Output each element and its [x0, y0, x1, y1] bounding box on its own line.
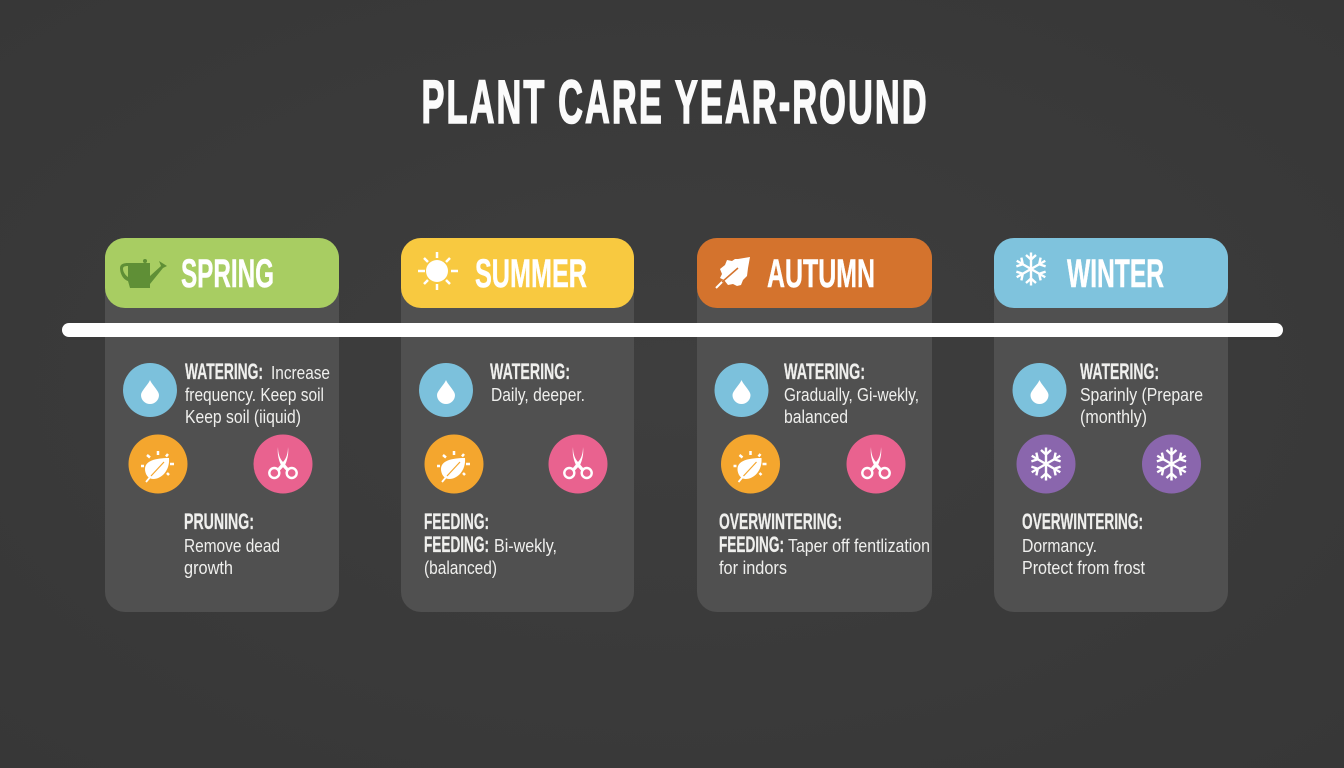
summer header — [401, 238, 634, 308]
autumn header — [697, 238, 932, 308]
spring header — [105, 238, 339, 308]
watering text: WATERING: — [490, 359, 570, 384]
icon: feeding leaf and sun — [128, 434, 188, 494]
icon: watering can — [120, 259, 167, 288]
overwintering text — [1022, 509, 1145, 578]
timeline bar — [62, 323, 1283, 337]
icon: leaf — [716, 257, 750, 288]
watering text: (monthly) — [1080, 406, 1147, 427]
pruning text: growth — [184, 557, 233, 578]
overwintering and feeding text: FEEDING: — [719, 532, 784, 557]
icon: water drop — [714, 363, 768, 417]
watering text: Keep soil (iiquid) — [185, 406, 301, 427]
overwintering and feeding text — [719, 509, 930, 578]
panel: autumn — [697, 238, 932, 612]
icon: scissors — [846, 434, 906, 494]
watering text — [185, 359, 330, 427]
pruning text: PRUNING: — [184, 509, 254, 534]
watering text: WATERING: — [185, 359, 263, 384]
autumn panel body — [697, 238, 932, 612]
overwintering text: Protect from frost — [1022, 557, 1145, 578]
panel: winter — [994, 238, 1228, 612]
watering text: Sparinly (Prepare — [1080, 384, 1203, 405]
feeding text: (balanced) — [424, 557, 497, 578]
watering text: WATERING: — [784, 359, 865, 384]
winter heading: WINTER — [1067, 252, 1164, 296]
icon: feeding leaf and sun — [424, 434, 484, 494]
icon: dormancy snowflake — [1142, 434, 1201, 494]
watering text — [1080, 359, 1203, 427]
winter header — [994, 238, 1228, 308]
overwintering text: Dormancy. — [1022, 535, 1097, 556]
autumn heading: AUTUMN — [767, 252, 875, 296]
overwintering and feeding text: Taper off fentlization — [788, 535, 930, 556]
spring heading: SPRING — [181, 252, 274, 296]
summer heading: SUMMER — [475, 252, 587, 296]
icon: water drop — [1012, 363, 1066, 417]
watering text: frequency. Keep soil — [185, 384, 324, 405]
summer panel body — [401, 238, 634, 612]
icon: water drop — [123, 363, 177, 417]
overwintering and feeding text: OVERWINTERING: — [719, 509, 842, 534]
title: PLANT CARE YEAR-ROUND — [422, 67, 927, 137]
icon: scissors — [254, 434, 312, 494]
feeding text — [424, 509, 557, 578]
watering text — [784, 359, 919, 427]
overwintering and feeding text: for indors — [719, 557, 787, 578]
feeding text: Bi-wekly, — [494, 535, 557, 556]
icon: feeding leaf and sun — [721, 434, 780, 494]
watering text — [490, 359, 585, 405]
watering text: Increase — [271, 362, 330, 383]
pruning text — [184, 509, 280, 578]
spring panel body — [105, 238, 339, 612]
feeding text: FEEDING: — [424, 509, 489, 534]
overwintering text: OVERWINTERING: — [1022, 509, 1143, 534]
icon: snowflake — [1014, 252, 1048, 286]
icon: overwintering snowflake — [1016, 434, 1076, 494]
icon: water drop — [419, 363, 473, 417]
watering text: Gradually, Gi-wekly, — [784, 384, 919, 405]
icon: sun — [418, 252, 458, 290]
winter panel body — [994, 238, 1228, 612]
watering text: Daily, deeper. — [491, 384, 585, 405]
icon: scissors — [548, 434, 608, 494]
watering text: WATERING: — [1080, 359, 1159, 384]
panel: spring — [105, 238, 339, 612]
pruning text: Remove dead — [184, 535, 280, 556]
feeding text: FEEDING: — [424, 532, 489, 557]
panel: summer — [401, 238, 634, 612]
watering text: balanced — [784, 406, 848, 427]
